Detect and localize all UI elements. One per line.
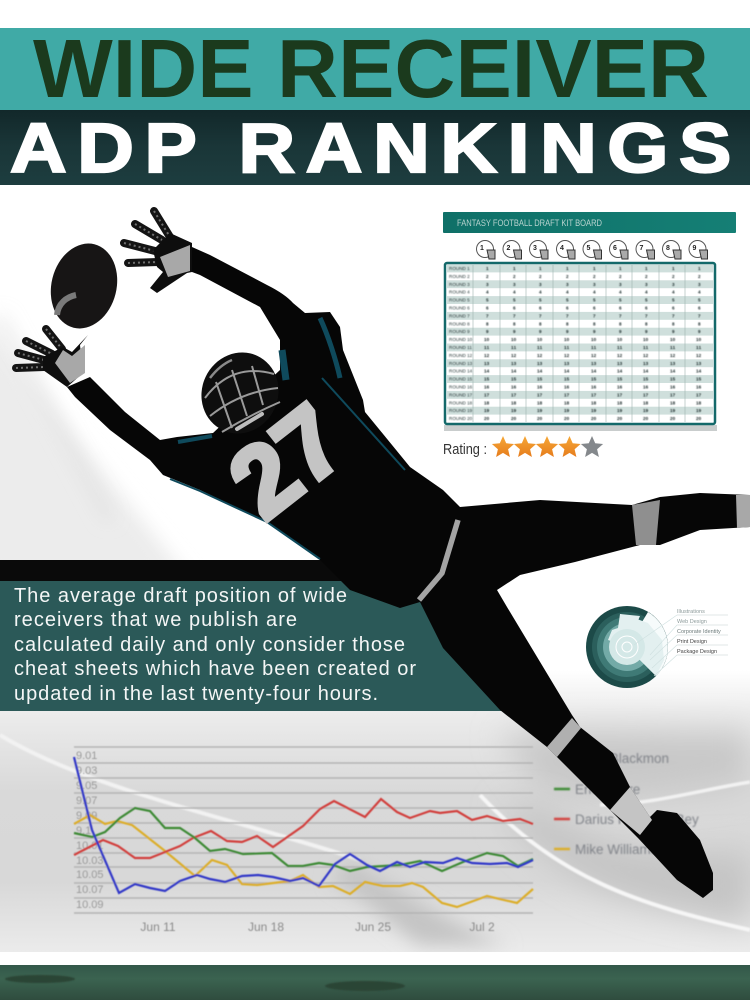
donut labels: Package Design: [677, 649, 717, 655]
chart legend: Justin Blackmon: [571, 751, 669, 766]
panel: description: [0, 560, 510, 711]
donut labels: Illustrations: [677, 609, 705, 615]
draft table: ROUND 16: [449, 384, 473, 390]
draft table: 171717171717171717: [484, 392, 702, 397]
x axis labels: Jun 25: [355, 920, 391, 934]
draft table: 141414141414141414: [484, 369, 702, 374]
x axis labels: Jun 11: [140, 920, 176, 934]
description text: calculated daily and only consider those: [14, 634, 405, 656]
draft table: [444, 263, 717, 431]
grass footer: [0, 952, 750, 1000]
draft table: 888888888: [486, 321, 701, 326]
y axis labels: [76, 750, 104, 911]
helmets row: 7: [640, 245, 644, 252]
draft table: ROUND 18: [449, 400, 473, 405]
draft table: 555555555: [486, 298, 701, 303]
donut labels: Corporate Identity: [677, 629, 721, 635]
draft table: ROUND 20: [449, 416, 473, 421]
board title bar: [443, 212, 736, 233]
lower glove: [16, 329, 88, 387]
upper glove: [124, 211, 192, 293]
ankle sock right: [736, 495, 750, 528]
helmets row: 2: [506, 245, 510, 252]
y axis labels: 9.09: [76, 810, 97, 822]
description text: cheat sheets which have been created or: [14, 658, 416, 680]
draft table: ROUND 4: [449, 290, 470, 295]
description text: receivers that we publish are: [14, 609, 297, 631]
draft table: ROUND 15: [449, 377, 473, 382]
draft table: ROUND 12: [449, 353, 473, 358]
line: red: [74, 799, 533, 858]
y axis labels: 10.01: [76, 840, 104, 852]
draft table: 111111111: [486, 266, 701, 271]
line: green: [74, 808, 533, 871]
draft table: ROUND 14: [449, 369, 473, 374]
draft table: ROUND 3: [449, 282, 470, 287]
helmets row: 9: [692, 245, 696, 252]
chart legend: Darius Heyward-Bey: [575, 812, 699, 827]
x axis labels: Jun 18: [248, 920, 284, 934]
draft table: ROUND 7: [449, 313, 470, 318]
helmet: [188, 340, 292, 446]
heading band: ADP RANKINGS: ADP RANKINGS: [10, 109, 731, 187]
heading band: WIDE RECEIVER: WIDE RECEIVER: [33, 22, 709, 115]
draft table: 333333333: [486, 282, 701, 287]
draft table: 101010101010101010: [484, 337, 702, 342]
draft table: 191919191919191919: [484, 408, 702, 413]
draft table: ROUND 10: [449, 337, 473, 342]
helmets row: 8: [666, 245, 670, 252]
helmets row: 1: [480, 245, 484, 252]
draft table: 161616161616161616: [484, 384, 702, 390]
donut labels: Print Design: [677, 639, 707, 645]
draft table: 666666666: [486, 306, 701, 310]
helmets row: 6: [613, 245, 617, 252]
helmets row: 5: [586, 245, 590, 252]
line: blue: [74, 757, 533, 893]
sock: [610, 787, 652, 835]
y axis labels: 10.09: [76, 899, 104, 911]
y axis labels: 9.01: [76, 750, 97, 762]
draft table: 999999999: [486, 329, 701, 334]
y axis labels: 9.03: [76, 765, 97, 777]
player body: [67, 247, 750, 898]
draft table: 131313131313131313: [484, 361, 702, 366]
player silhouette: [16, 211, 750, 898]
chart legend: Mike Williams: [575, 842, 658, 857]
football: [42, 236, 126, 336]
draft table: ROUND 17: [449, 392, 473, 397]
y axis labels: 9.1: [76, 825, 91, 837]
donut labels: Web Design: [677, 619, 707, 625]
draft table: ROUND 13: [449, 361, 473, 366]
y axis labels: 9.07: [76, 795, 97, 807]
description text: The average draft position of wide: [14, 585, 347, 607]
draft table: 121212121212121212: [484, 353, 702, 358]
draft table: ROUND 8: [449, 321, 470, 326]
draft table: 222222222: [486, 274, 701, 279]
draft table: 777777777: [486, 313, 701, 318]
draft table: ROUND 11: [449, 345, 472, 350]
x axis labels: Jul 2: [469, 920, 495, 934]
draft table: 202020202020202020: [484, 416, 702, 421]
board title bar: FANTASY FOOTBALL DRAFT KIT BOARD: [457, 218, 602, 229]
draft table: ROUND 2: [449, 274, 470, 279]
jersey accents: [170, 318, 405, 559]
belt: [419, 520, 458, 600]
y axis labels: 10.03: [76, 855, 104, 867]
panel: draft kit board: [443, 212, 736, 458]
draft table: ROUND 6: [449, 306, 470, 310]
draft table: ROUND 1: [449, 266, 470, 271]
jersey number: 27: [209, 383, 366, 540]
draft table: ROUND 9: [449, 329, 470, 334]
chart legend: [554, 751, 699, 857]
draft table: 151515151515151515: [484, 377, 702, 382]
rating stars: Rating :: [443, 442, 487, 458]
helmets row: 4: [560, 245, 564, 252]
draft table: 111111111111111111: [484, 345, 702, 350]
x axis labels: [140, 920, 495, 934]
line chart: [74, 747, 533, 934]
y axis labels: 9.05: [76, 780, 97, 792]
draft table: 181818181818181818: [484, 400, 702, 405]
donut chart: [586, 606, 728, 688]
leg band: [547, 718, 581, 757]
knee band: [632, 500, 660, 545]
y axis labels: 10.07: [76, 884, 104, 896]
donut labels: [634, 609, 728, 676]
line: yellow: [74, 815, 533, 907]
helmets row: [476, 240, 708, 259]
helmets row: 3: [533, 245, 537, 252]
draft table: ROUND 5: [449, 298, 470, 303]
rating stars: [443, 436, 603, 458]
draft table: ROUND 19: [449, 408, 473, 413]
description text: [14, 585, 416, 705]
description text: updated in the last twenty-four hours.: [14, 683, 378, 705]
chart legend: Eric Moore: [575, 782, 640, 797]
y axis labels: 10.05: [76, 869, 104, 881]
draft table: 444444444: [486, 290, 701, 295]
